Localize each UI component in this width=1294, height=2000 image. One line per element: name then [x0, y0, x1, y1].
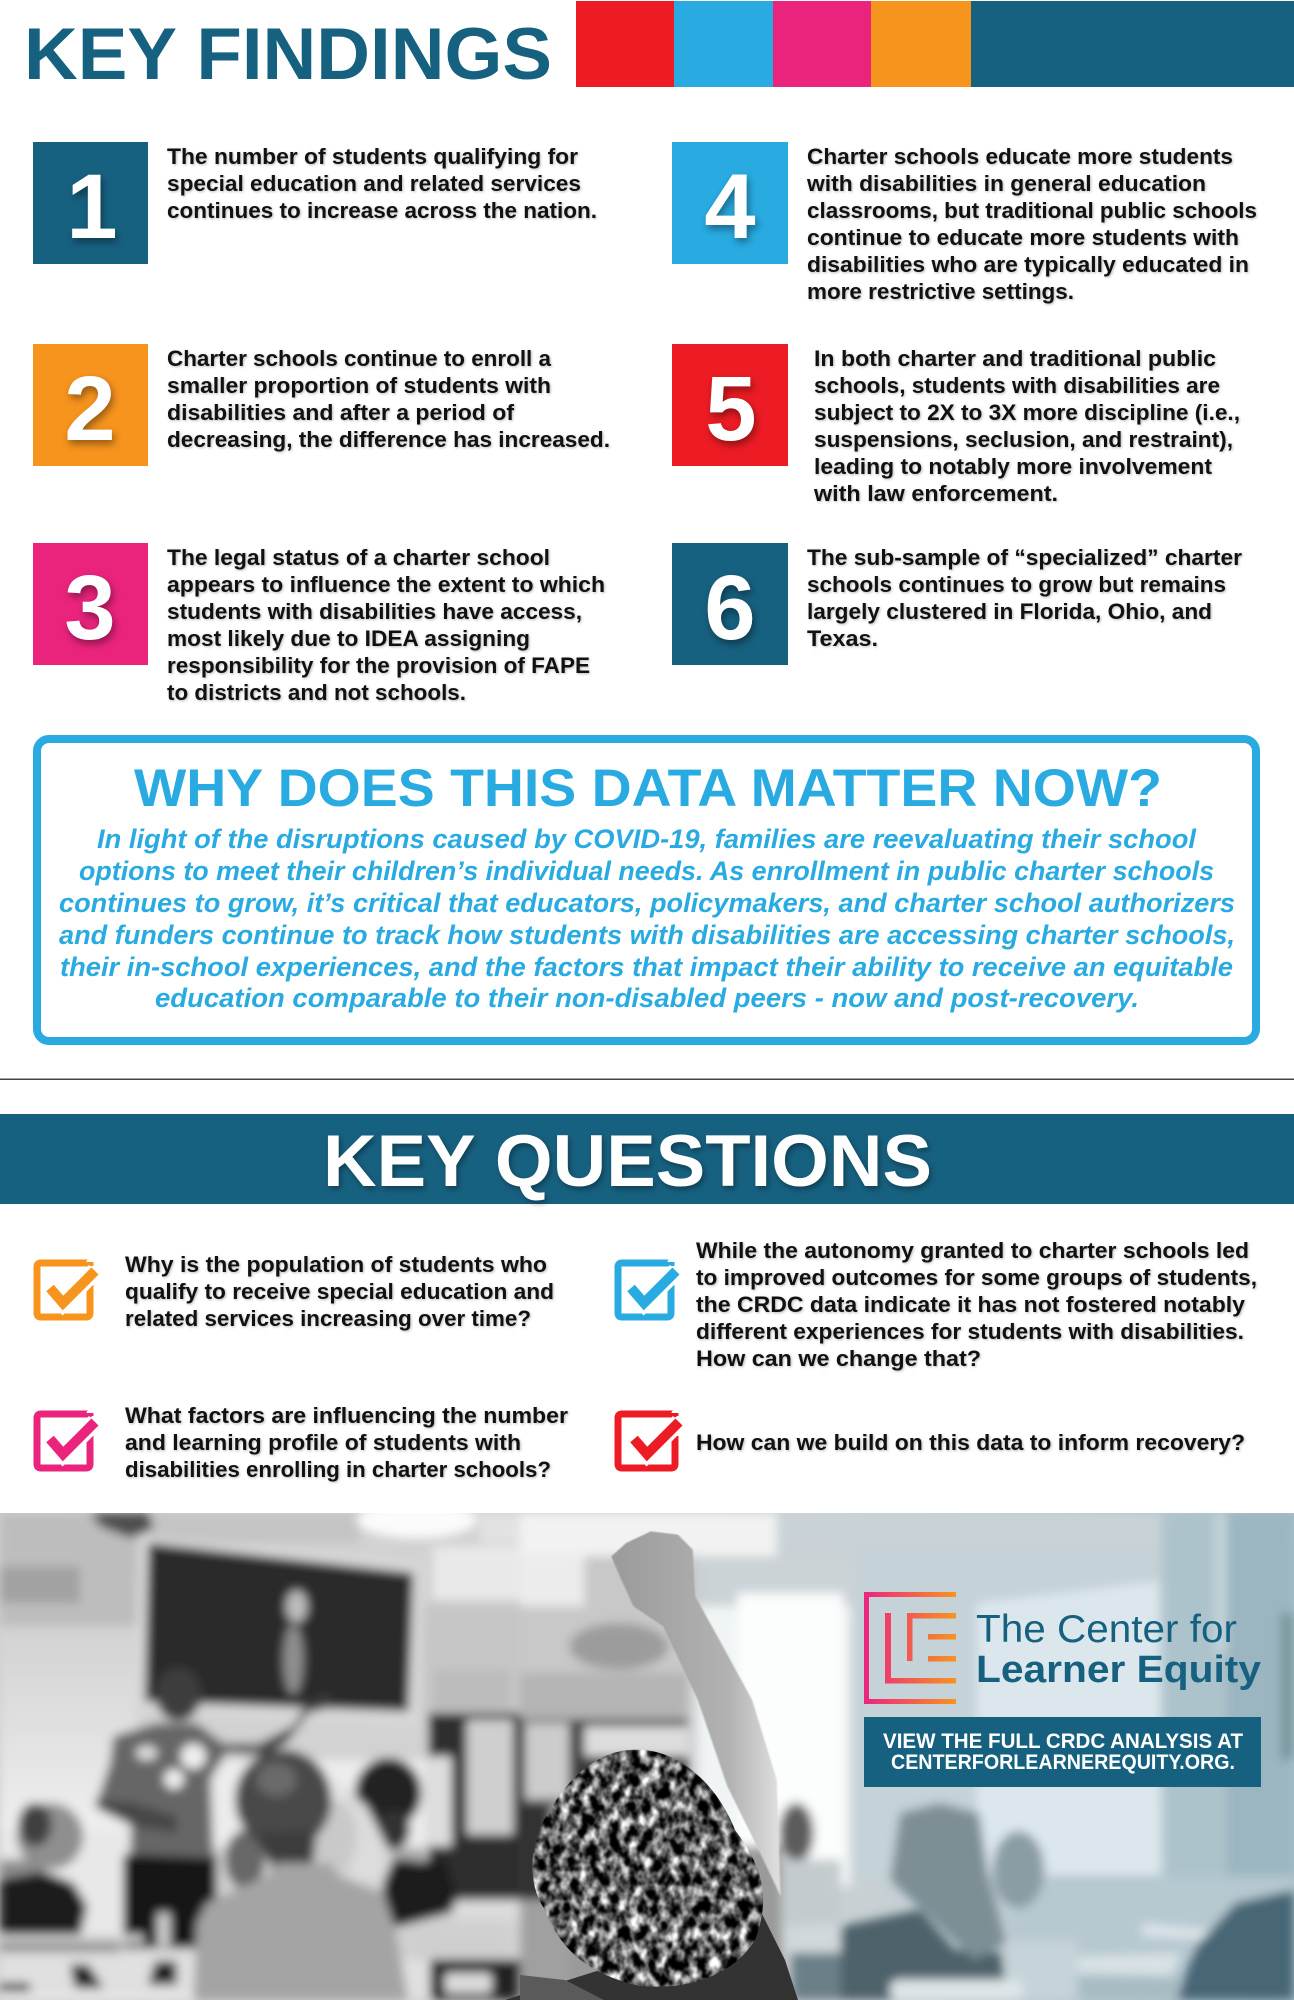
- panel paragraph: options to meet their children’s individual needs. As enrollment in public charter schools: [79, 856, 1214, 886]
- number badge 5: 5: [705, 358, 757, 460]
- panel: why does this data matter now: [37, 739, 1256, 1041]
- panel paragraph: In light of the disruptions caused by COVID-19, families are reevaluating their school: [97, 824, 1196, 854]
- right desks: [462, 1906, 515, 1916]
- question 2 text: [125, 1403, 568, 1482]
- finding 2 text: decreasing, the difference has increased.: [167, 427, 610, 452]
- logo wordmark: The Center for: [976, 1608, 1237, 1651]
- finding 4: [672, 142, 1257, 304]
- number badge 1: 1: [66, 156, 118, 258]
- finding 2: [33, 344, 610, 466]
- number badge 5: [672, 344, 788, 466]
- panel paragraph: continues to grow, it’s critical that educators, policymakers, and charter school authorizers: [59, 888, 1235, 918]
- finding 4 text: [806, 144, 1257, 304]
- centre student: [310, 1800, 357, 1873]
- number badge 6: 6: [704, 557, 756, 659]
- question 3 text: How can we change that?: [696, 1346, 981, 1371]
- finding 5 text: with law enforcement.: [813, 481, 1058, 506]
- finding 6 text: Texas.: [807, 626, 878, 651]
- finding 6: [672, 543, 1242, 665]
- finding 3 text: appears to influence the extent to which: [167, 572, 605, 597]
- curly-haired student: [505, 1750, 798, 2000]
- question 2 text: disabilities enrolling in charter schools?: [125, 1457, 551, 1482]
- question 3 text: different experiences for students with disabilities.: [696, 1319, 1244, 1344]
- icon: blue checkbox: [618, 1262, 676, 1317]
- finding 5 text: leading to notably more involvement: [814, 454, 1213, 479]
- colour bar: [576, 1, 1294, 87]
- call to action box: CENTERFORLEARNEREQUITY.ORG.: [891, 1751, 1235, 1774]
- finding 5 text: [813, 346, 1240, 506]
- raised arm: [611, 1531, 781, 1896]
- question 4: [618, 1413, 1245, 1468]
- finding 1 text: The number of students qualifying for: [167, 144, 578, 169]
- question 1 text: [125, 1252, 554, 1331]
- finding 6 text: The sub-sample of “specialized” charter: [807, 545, 1242, 570]
- question 3 text: While the autonomy granted to charter schools led: [696, 1238, 1249, 1263]
- question 2 text: What factors are influencing the number: [125, 1403, 568, 1428]
- question 3 text: to improved outcomes for some groups of students,: [696, 1265, 1257, 1290]
- number badge 4: [672, 142, 788, 264]
- finding 4 text: Charter schools educate more students: [807, 144, 1233, 169]
- finding 6 text: largely clustered in Florida, Ohio, and: [807, 599, 1212, 624]
- panel heading: WHY DOES THIS DATA MATTER NOW?: [134, 759, 1162, 818]
- question 4 text: How can we build on this data to inform recovery?: [696, 1430, 1245, 1455]
- finding 1 text: [167, 144, 597, 223]
- call to action box: VIEW THE FULL CRDC ANALYSIS AT: [883, 1730, 1243, 1753]
- finding 3 text: responsibility for the provision of FAPE: [167, 653, 590, 678]
- icon: orange checkbox: [37, 1262, 95, 1317]
- finding 1 text: special education and related services: [167, 171, 581, 196]
- finding 2 text: disabilities and after a period of: [167, 400, 515, 425]
- finding 3: [33, 543, 605, 705]
- panel paragraph: their in-school experiences, and the factors that impact their ability to receive an equitable: [60, 952, 1233, 982]
- finding 2 text: smaller proportion of students with: [167, 373, 551, 398]
- question 1 text: qualify to receive special education and: [125, 1279, 554, 1304]
- number badge 2: [33, 344, 148, 466]
- question 3: [618, 1238, 1257, 1371]
- finding 5 text: schools, students with disabilities are: [814, 373, 1220, 398]
- finding 3 text: most likely due to IDEA assigning: [167, 626, 530, 651]
- question 1: [37, 1252, 554, 1331]
- finding 5 text: suspensions, seclusion, and restraint),: [814, 427, 1233, 452]
- finding 4 text: disabilities who are typically educated in: [807, 252, 1249, 277]
- question 1 text: related services increasing over time?: [125, 1306, 531, 1331]
- dark hair student: [355, 1758, 422, 1828]
- question 2: [37, 1403, 568, 1482]
- finding 4 text: classrooms, but traditional public schools: [807, 198, 1257, 223]
- finding 3 text: students with disabilities have access,: [167, 599, 582, 624]
- finding 6 text: [807, 545, 1242, 651]
- finding 6 text: schools continues to grow but remains: [807, 572, 1226, 597]
- finding 3 text: [167, 545, 605, 705]
- number badge 3: 3: [64, 557, 116, 659]
- number badge 3: [33, 543, 148, 665]
- icon: red checkbox: [618, 1413, 679, 1468]
- teacher: [123, 1855, 217, 1948]
- finding 1: [33, 142, 597, 264]
- finding 5 text: In both charter and traditional public: [814, 346, 1216, 371]
- classroom photo: [0, 1501, 1294, 2000]
- desks: [0, 1935, 143, 1943]
- panel paragraph: education comparable to their non-disabled peers - now and post-recovery.: [155, 983, 1139, 1013]
- finding 3 text: The legal status of a charter school: [167, 545, 550, 570]
- finding 5 text: subject to 2X to 3X more discipline (i.e.,: [814, 400, 1240, 425]
- question 3 text: [696, 1238, 1257, 1371]
- left student: [17, 1803, 83, 1870]
- question 1 text: Why is the population of students who: [125, 1252, 547, 1277]
- title: key findings: KEY FINDINGS: [24, 14, 552, 95]
- key questions band: [0, 1114, 1294, 1204]
- left half of photo: [0, 1501, 1294, 2000]
- logo mark: [864, 1592, 956, 1704]
- finding 4 text: more restrictive settings.: [807, 279, 1074, 304]
- finding 2 text: [167, 346, 610, 452]
- logo: the center for learner equity: [864, 1592, 1261, 1704]
- panel paragraph: [59, 824, 1235, 1013]
- right half of photo, background and students: [520, 1513, 1294, 2000]
- question 2 text: and learning profile of students with: [125, 1430, 521, 1455]
- logo wordmark: Learner Equity: [976, 1649, 1261, 1691]
- number badge 6: [672, 543, 788, 665]
- finding 4 text: with disabilities in general education: [806, 171, 1206, 196]
- panel paragraph: and funders continue to track how students with disabilities are accessing charter schools,: [59, 920, 1235, 950]
- call to action box: [864, 1717, 1261, 1787]
- finding 5: [672, 344, 1240, 506]
- logo wordmark: [976, 1608, 1261, 1691]
- finding 1 text: continues to increase across the nation.: [167, 198, 597, 223]
- finding 2 text: Charter schools continue to enroll a: [167, 346, 551, 371]
- finding 4 text: continue to educate more students with: [807, 225, 1239, 250]
- question 3 text: the CRDC data indicate it has not fostered notably: [696, 1292, 1245, 1317]
- icon: pink checkbox: [37, 1413, 95, 1468]
- number badge 4: 4: [704, 156, 756, 258]
- key questions heading: KEY QUESTIONS: [323, 1121, 932, 1202]
- finding 3 text: to districts and not schools.: [167, 680, 466, 705]
- number badge 2: 2: [64, 358, 116, 460]
- number badge 1: [33, 142, 148, 264]
